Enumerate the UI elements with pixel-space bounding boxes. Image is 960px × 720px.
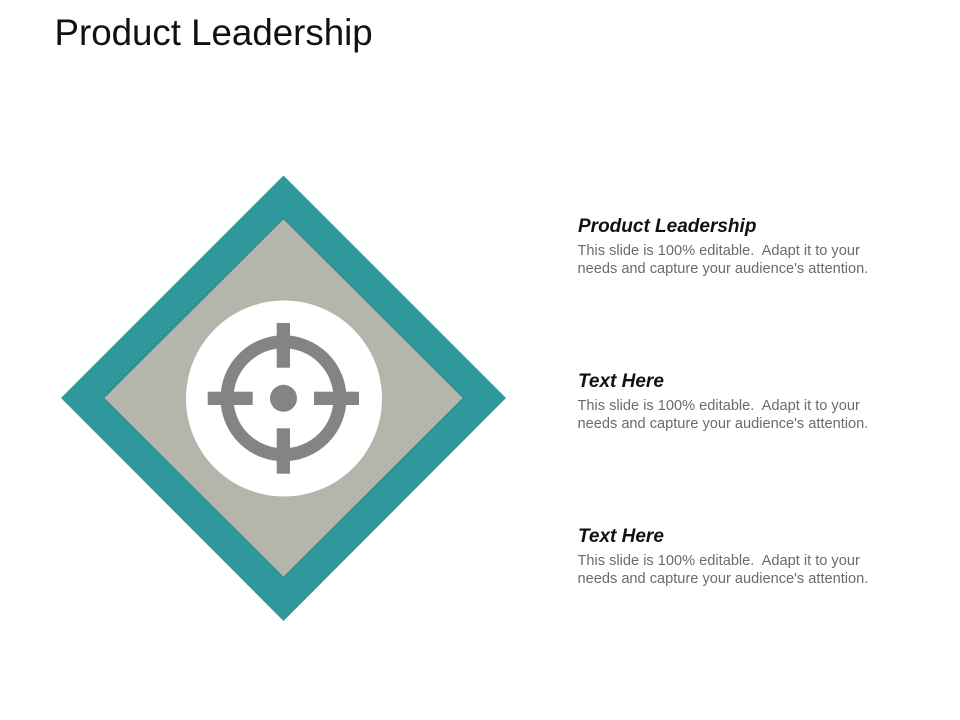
text block: Product Leadership: This slide is 100% editable. Adapt it to your <box>578 243 860 259</box>
text block: Product Leadership <box>578 216 868 277</box>
text block: Text Here 2: needs and capture your audience's attention. <box>578 571 868 587</box>
text block: Text Here 2: Text Here <box>578 526 664 547</box>
white circle <box>186 300 382 496</box>
text block: Product Leadership: Product Leadership <box>578 216 756 237</box>
text block: Text Here 1: Text Here <box>578 371 664 392</box>
text block: Text Here 2: This slide is 100% editable. Adapt it to your <box>578 553 860 569</box>
title: Product Leadership <box>54 12 373 53</box>
text block: Text Here 1: This slide is 100% editable. Adapt it to your <box>578 398 860 414</box>
text block: Product Leadership: needs and capture your audience's attention. <box>578 261 868 277</box>
text block: Text Here 1: needs and capture your audience's attention. <box>578 416 868 432</box>
outer teal diamond <box>61 176 506 621</box>
text block: Text Here 2 <box>578 526 868 587</box>
text block: Text Here 1 <box>578 371 868 432</box>
icon: crosshair target <box>208 323 359 474</box>
inner grey diamond <box>104 218 464 578</box>
